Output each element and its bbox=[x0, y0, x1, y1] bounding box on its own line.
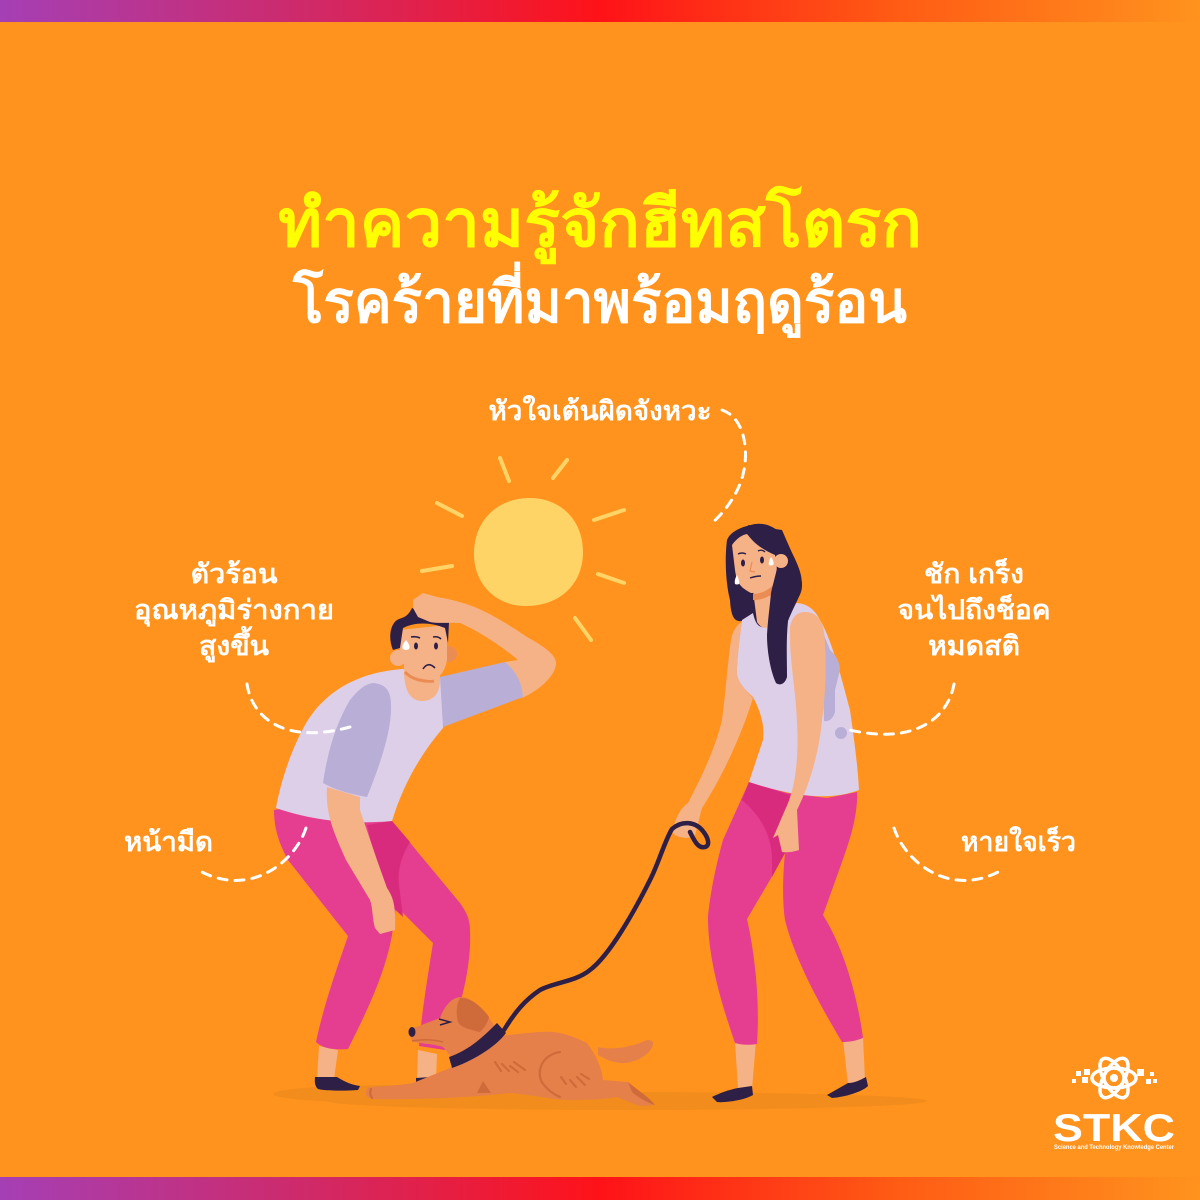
woman front hair lock bbox=[748, 525, 802, 684]
dog tail bbox=[598, 1040, 653, 1063]
dashed line: dizziness bbox=[200, 828, 306, 880]
man hair bbox=[390, 608, 449, 650]
woman top shadow bbox=[822, 630, 840, 721]
man left arm bbox=[327, 787, 395, 934]
dashed line: heartbeat bbox=[710, 410, 745, 525]
dog collar bbox=[449, 1023, 506, 1068]
trouser shade bbox=[367, 821, 410, 917]
dog face lines bbox=[439, 1019, 450, 1025]
woman neck bbox=[753, 580, 775, 628]
dog bbox=[366, 997, 655, 1106]
man neck bbox=[404, 665, 440, 701]
leash bbox=[504, 823, 708, 1030]
ground shadows bbox=[273, 1085, 927, 1110]
man eyes and mouth bbox=[411, 637, 441, 669]
top gradient bar bbox=[0, 0, 1200, 22]
woman hair back bbox=[726, 524, 802, 650]
dashed line: convulsions bbox=[850, 684, 954, 734]
label: rapid breathing: หายใจเร็ว bbox=[961, 824, 1076, 857]
man trousers bbox=[274, 800, 470, 1050]
dog hind foot bbox=[628, 1082, 655, 1105]
label: convulsions: ชัก เกร็ง bbox=[924, 556, 1024, 589]
sun bbox=[422, 458, 624, 640]
woman ankles bbox=[735, 1037, 865, 1089]
woman shoes bbox=[712, 1077, 868, 1102]
label: heartbeat: หัวใจเต้นผิดจังหวะ bbox=[488, 395, 712, 426]
woman figure bbox=[672, 524, 868, 1102]
logo tagline: Science and Technology Knowledge Center bbox=[1054, 1145, 1175, 1151]
man sweat drop bbox=[402, 640, 410, 650]
woman trousers bbox=[708, 782, 863, 1045]
woman neck shadow bbox=[753, 583, 775, 600]
STKC logo bbox=[1053, 1054, 1175, 1151]
man raised arm bbox=[413, 593, 556, 698]
woman side dot bbox=[835, 727, 847, 739]
woman sweat drops bbox=[735, 557, 774, 584]
dog ear bbox=[457, 998, 489, 1032]
dog chest shade bbox=[477, 1081, 491, 1093]
label: convulsions: จนไปถึงช็อค bbox=[898, 592, 1050, 625]
woman ear bbox=[774, 554, 788, 568]
label: body heat bbox=[134, 559, 334, 663]
title: ทำความรู้จักฮีทสโตรก bbox=[278, 184, 922, 265]
man face bbox=[399, 625, 447, 680]
dog fur lines bbox=[370, 1052, 589, 1098]
man right sleeve bbox=[440, 662, 523, 727]
dog head bbox=[408, 997, 500, 1058]
label: dizziness: หน้ามืด bbox=[124, 827, 213, 857]
label: body heat: สูงขึ้น bbox=[199, 625, 270, 663]
label: convulsions: หมดสติ bbox=[928, 631, 1020, 661]
woman face bbox=[732, 534, 777, 593]
woman nose bbox=[750, 562, 755, 572]
woman trouser shade bbox=[742, 782, 790, 877]
neck shadow bbox=[405, 672, 434, 681]
dashed line: rapid breathing bbox=[894, 828, 1000, 880]
logo wordmark: STKC bbox=[1053, 1107, 1175, 1150]
logo atom icon bbox=[1092, 1054, 1136, 1102]
man far ear bbox=[441, 646, 457, 662]
man shoes bbox=[315, 1077, 440, 1091]
dog nose bbox=[408, 1027, 416, 1037]
subtitle: โรคร้ายที่มาพร้อมฤดูร้อน bbox=[292, 261, 907, 338]
man figure bbox=[274, 593, 556, 1091]
label: convulsions bbox=[898, 556, 1050, 661]
woman right arm bbox=[773, 612, 826, 852]
dashed line: body heat bbox=[247, 684, 350, 733]
label: body heat: อุณหภูมิร่างกาย bbox=[134, 595, 334, 627]
woman top bbox=[737, 603, 859, 796]
man left sleeve bbox=[323, 683, 391, 797]
man shirt bbox=[276, 669, 445, 822]
logo pixel squares bbox=[1072, 1069, 1157, 1084]
man ear bbox=[390, 650, 406, 666]
label: body heat: ตัวร้อน bbox=[190, 559, 278, 589]
woman left arm bbox=[672, 622, 753, 838]
dog body bbox=[366, 1032, 655, 1106]
man ankles bbox=[317, 1046, 437, 1079]
woman eyes and mouth bbox=[738, 550, 765, 578]
bottom gradient bar bbox=[0, 1177, 1200, 1200]
